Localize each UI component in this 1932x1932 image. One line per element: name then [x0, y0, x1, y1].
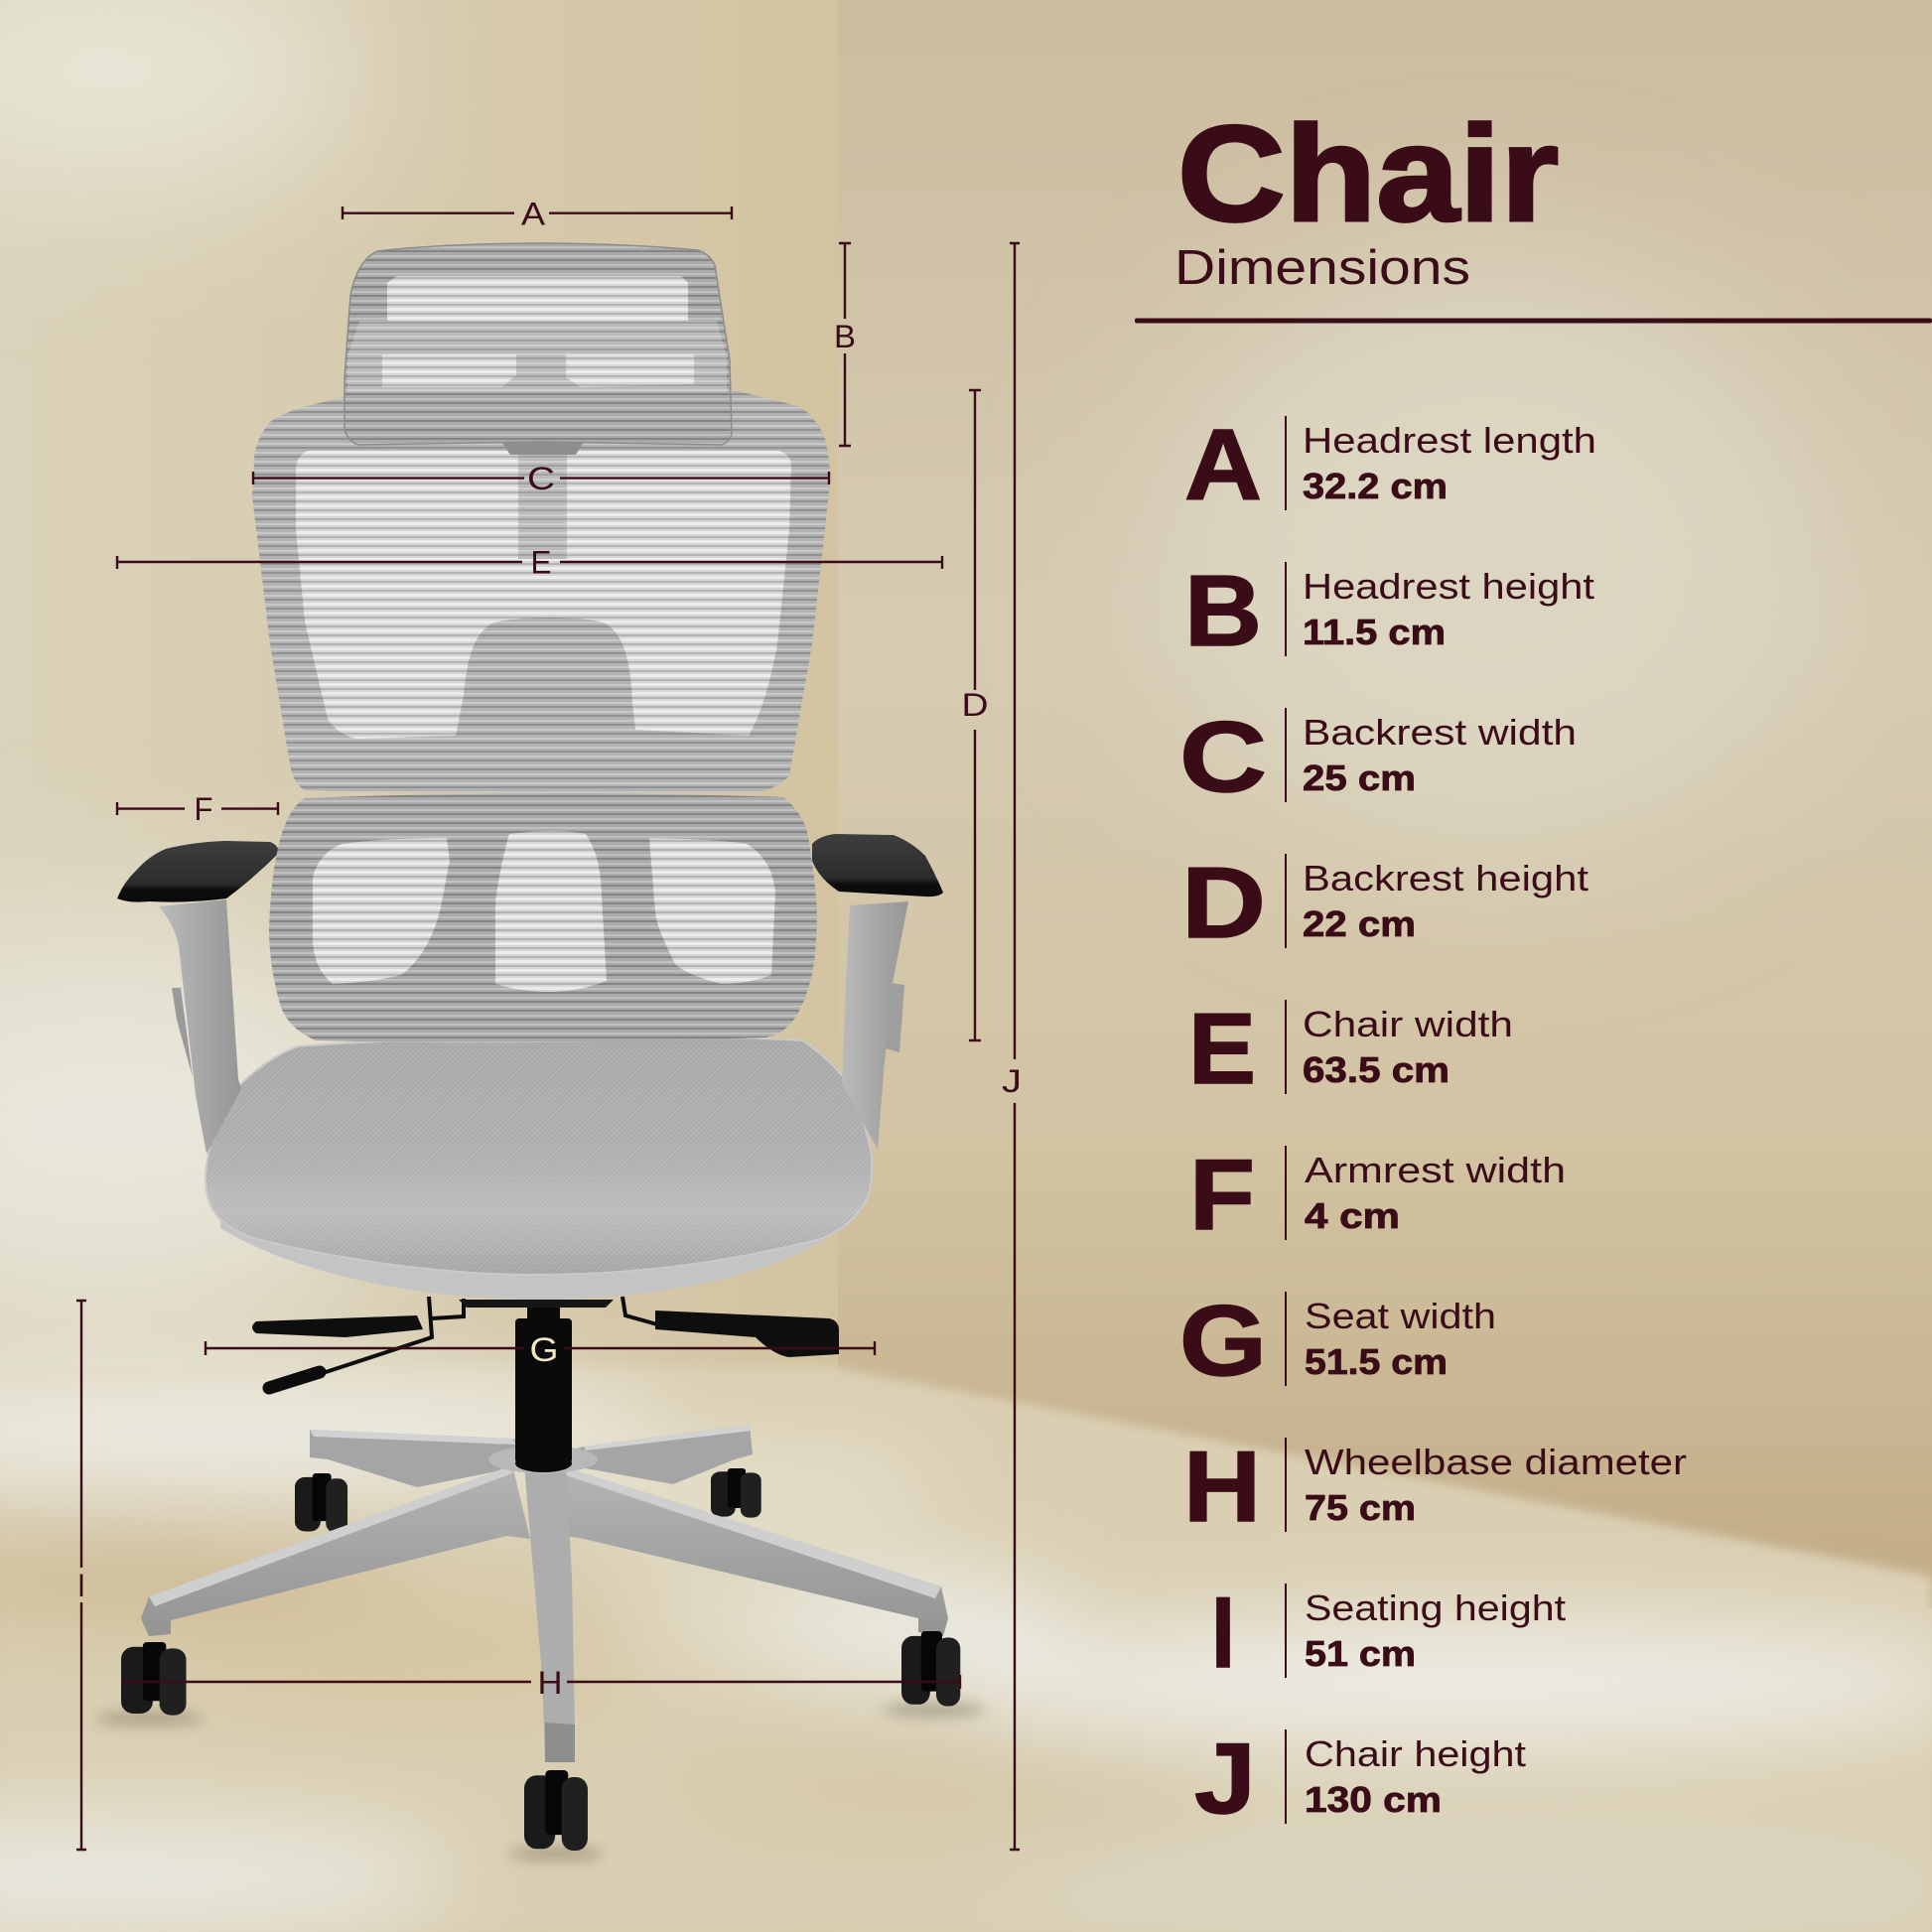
right armrest pad [812, 834, 943, 897]
headrest mesh panel [345, 243, 732, 445]
row I: I [1211, 1578, 1235, 1689]
dimension H [121, 1665, 960, 1701]
title rule [1135, 318, 1932, 324]
dimension J [1002, 243, 1022, 1850]
left armrest pad [117, 841, 278, 902]
legend list [1179, 410, 1687, 1835]
dimension B: B [834, 319, 856, 354]
dimension I: I [77, 1568, 85, 1603]
adjustment levers [252, 1297, 839, 1388]
subheading: Dimensions: Dimensions [1174, 241, 1470, 295]
row A [1184, 410, 1596, 521]
row I: Seating height [1305, 1587, 1566, 1628]
row E [1188, 994, 1513, 1105]
row D: 22 cm [1303, 903, 1416, 944]
dimension A [343, 197, 732, 232]
dimension lines and letters on the chair [76, 197, 1022, 1850]
dimension D: D [961, 687, 989, 723]
row B: 11.5 cm [1303, 612, 1446, 652]
row C [1179, 702, 1577, 813]
row F: Armrest width [1305, 1150, 1566, 1190]
dimension C: C [527, 461, 555, 496]
row G: Seat width [1305, 1296, 1496, 1336]
row J: 130 cm [1305, 1779, 1442, 1820]
right armrest support [842, 901, 908, 1150]
row H: H [1183, 1432, 1261, 1543]
front casters [121, 1631, 960, 1851]
dimension F: F [195, 791, 212, 827]
row G: G [1179, 1286, 1267, 1397]
five-star base [141, 1425, 948, 1762]
dimension D [961, 390, 989, 1040]
row A: Headrest length [1303, 420, 1596, 461]
dimension F [117, 791, 278, 827]
row J [1194, 1724, 1526, 1835]
dimension C [253, 461, 829, 496]
chair photograph illustration [94, 243, 985, 1861]
dimension G: G [530, 1331, 558, 1369]
caster shadows [94, 1703, 985, 1861]
row G [1179, 1286, 1496, 1397]
row F: F [1189, 1140, 1255, 1251]
row A: 32.2 cm [1303, 466, 1448, 506]
row I: 51 cm [1305, 1633, 1416, 1674]
left armrest support [159, 899, 241, 1154]
row A: A [1184, 410, 1262, 521]
row B: Headrest height [1303, 566, 1594, 607]
row D: D [1181, 848, 1266, 959]
dimension E: E [530, 544, 552, 580]
dimension H: H [538, 1665, 562, 1701]
row D: Backrest height [1303, 858, 1588, 898]
dimension I [76, 1301, 86, 1850]
gas cylinder [515, 1303, 572, 1472]
title [1135, 98, 1932, 324]
dimension J: J [1002, 1063, 1022, 1099]
row G: 51.5 cm [1305, 1341, 1448, 1382]
lumbar mesh panel [269, 793, 817, 1042]
row I [1211, 1578, 1566, 1689]
row J: J [1194, 1724, 1256, 1835]
row E: E [1188, 994, 1256, 1105]
row D [1181, 848, 1588, 959]
row C: Backrest width [1303, 712, 1577, 753]
dimension B [834, 243, 856, 446]
rear casters [295, 1468, 761, 1533]
row E: Chair width [1303, 1004, 1513, 1044]
dimension E [117, 544, 942, 580]
row C: 25 cm [1303, 758, 1416, 798]
backrest mesh panel [252, 391, 830, 793]
row C: C [1179, 702, 1267, 813]
row H: 75 cm [1305, 1487, 1416, 1528]
row F [1189, 1140, 1566, 1251]
row F: 4 cm [1305, 1195, 1400, 1236]
heading: Chair: Chair [1177, 98, 1559, 250]
seat [206, 1036, 872, 1300]
row H [1183, 1432, 1687, 1543]
dimension G [206, 1331, 875, 1369]
row B [1184, 556, 1594, 667]
dimension A: A [521, 197, 546, 232]
row E: 63.5 cm [1303, 1049, 1449, 1090]
row B: B [1184, 556, 1262, 667]
row H: Wheelbase diameter [1305, 1442, 1687, 1482]
row J: Chair height [1305, 1733, 1526, 1774]
